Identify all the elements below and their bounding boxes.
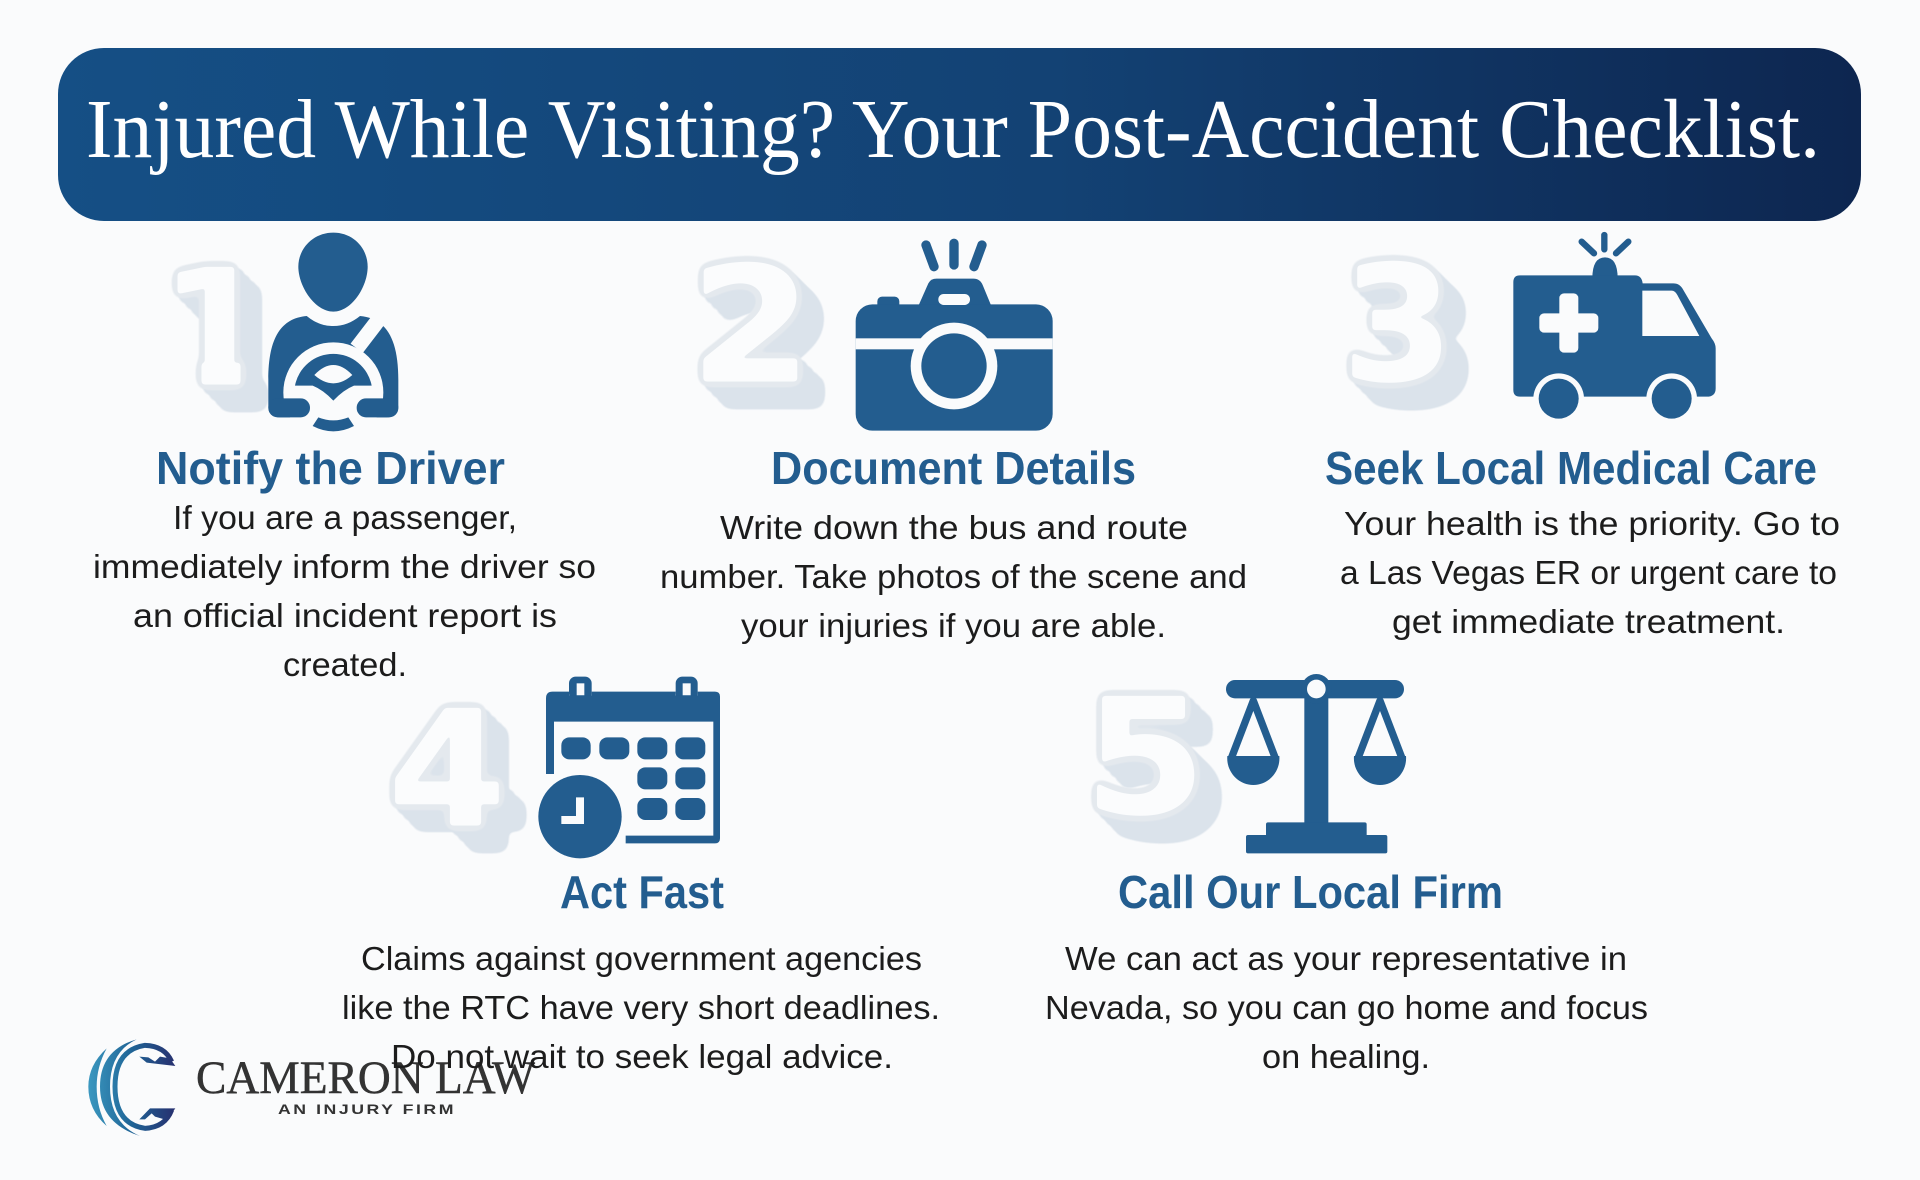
step 3: body text: Your health is the priority. Go to [1344,505,1840,542]
step 5: body text: on healing. [1262,1038,1430,1075]
logo [88,1039,536,1136]
step 4: number: 4 [388,676,506,863]
logo: AN INJURY FIRM [278,1101,456,1117]
step 1: number: 1 [160,235,271,422]
step 2: camera icon [856,243,1053,431]
step 5: heading: Call Our Local Firm [1118,866,1503,918]
step 3: body text: get immediate treatment. [1392,603,1785,640]
step 4: heading: Act Fast [560,866,724,918]
step 5: body text: We can act as your representative in [1065,940,1627,977]
step 5: body text [1045,940,1648,1075]
logo: CAMERON LAW [196,1052,536,1104]
step 2: body text: number. Take photos of the scene and [660,558,1247,595]
step 2: body text: Write down the bus and route [720,509,1188,546]
step 3: number: 3 [1342,231,1453,418]
step 4: body text: Do not wait to seek legal advice. [391,1038,893,1075]
step 2: body text: your injuries if you are able. [741,607,1166,644]
step 3: heading: Seek Local Medical Care [1325,442,1817,494]
step 3: body text: a Las Vegas ER or urgent care to [1340,554,1837,591]
step 5: body text: Nevada, so you can go home and focus [1045,989,1648,1026]
title banner: Injured While Visiting? Your Post-Accident Checklist. [86,83,1820,176]
step 5: scales of justice icon [1226,674,1406,853]
step 4: body text: like the RTC have very short deadlines. [342,989,940,1026]
step 3: ambulance icon [1513,235,1716,424]
step 3: body text [1340,505,1840,640]
step 4: calendar and clock icon [538,677,720,858]
step 5: number: 5 [1084,664,1206,851]
step 1: body text [93,499,596,683]
step 4: body text [342,940,940,1075]
step 2: heading: Document Details [771,442,1136,494]
step 1: heading: Notify the Driver [156,442,505,494]
step 2: body text [660,509,1247,644]
title banner [58,48,1861,221]
step 2: number: 2 [690,232,812,419]
step 1: body text: an official incident report is [133,597,557,634]
step 4: body text: Claims against government agencies [361,940,922,977]
step 1: body text: created. [283,646,407,683]
step 1: body text: immediately inform the driver so [93,548,596,585]
step 1: driver icon [268,233,398,442]
step 1: body text: If you are a passenger, [173,499,517,536]
